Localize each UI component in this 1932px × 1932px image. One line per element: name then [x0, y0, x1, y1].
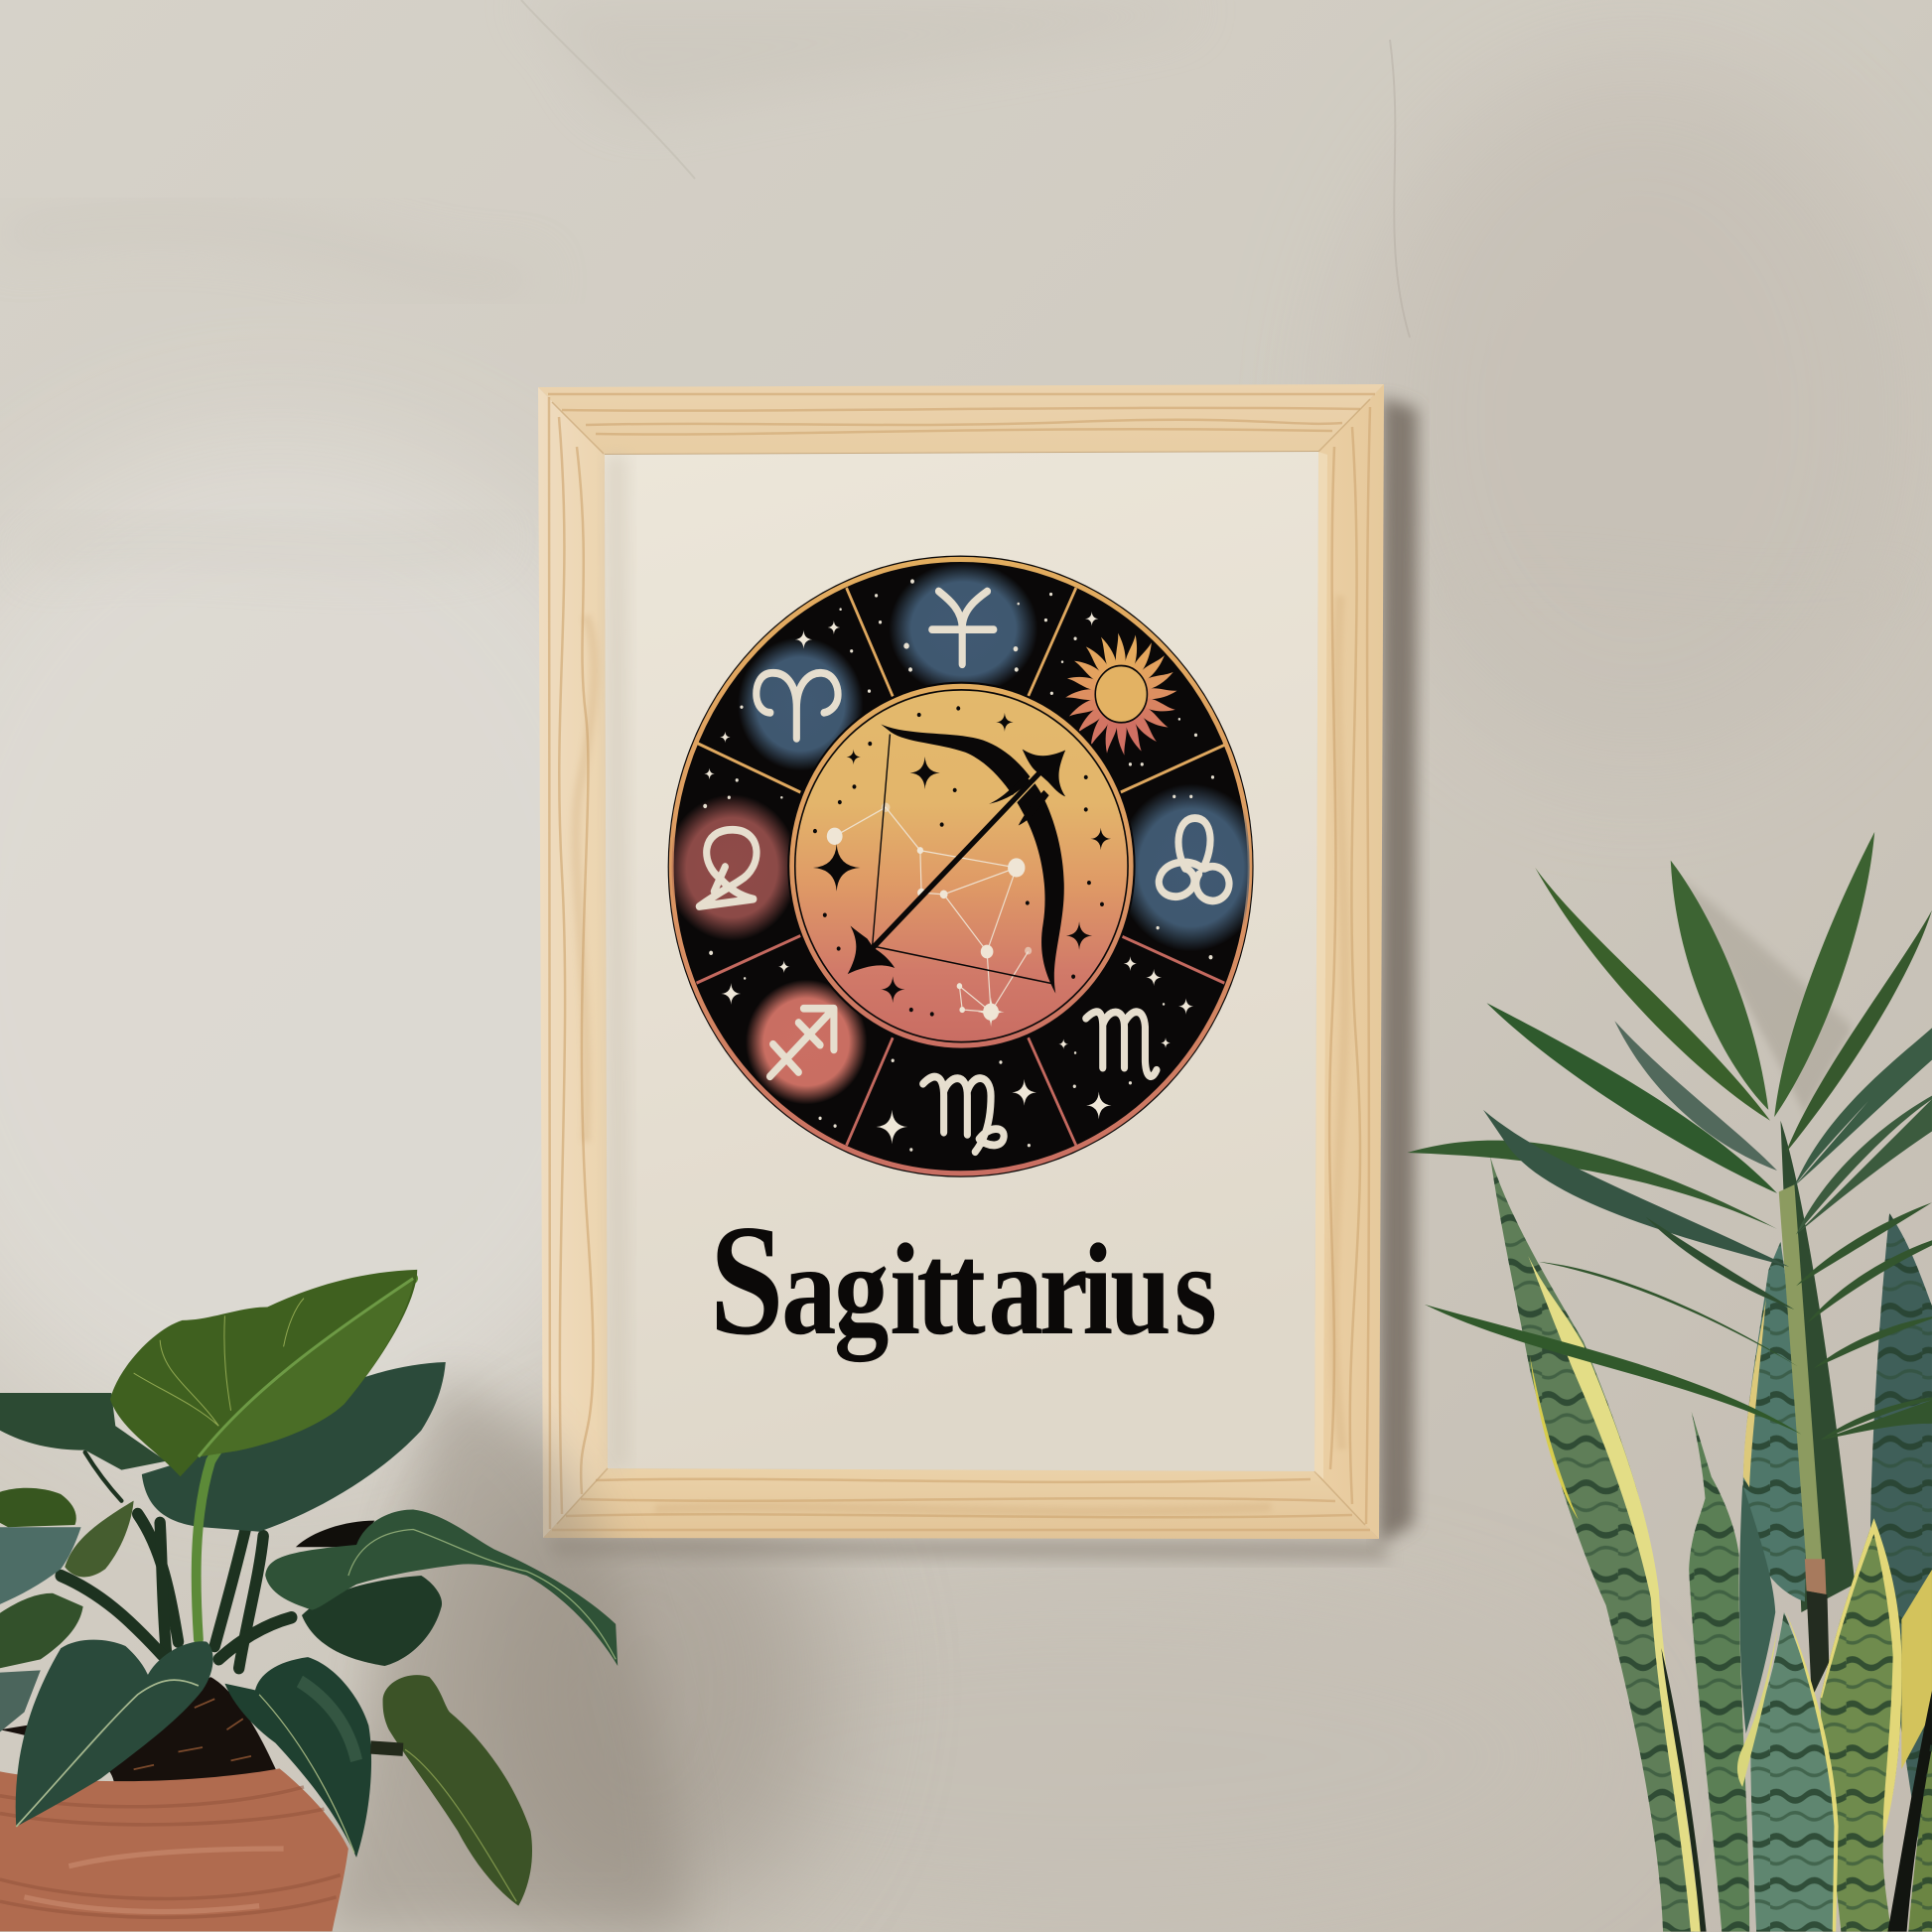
arrow head — [1023, 750, 1065, 796]
snake leaf: center back — [1743, 1242, 1806, 1601]
snake leaf: back right — [1870, 1213, 1932, 1932]
leaflets right thin — [1796, 1202, 1932, 1440]
leaflet left broad — [1483, 1110, 1789, 1267]
leaflet top right — [1774, 832, 1874, 1117]
leaf: bottom center — [224, 1657, 371, 1858]
leaflet left thin — [1539, 1262, 1798, 1366]
stalk of hanging leaf — [370, 1747, 403, 1749]
leaflet faded behind — [1614, 1021, 1777, 1171]
title: Sagittarius — [710, 1191, 1217, 1368]
leaf: small upper left — [0, 1488, 76, 1527]
icon: horned sign, top — [932, 592, 994, 664]
icon: sea-goat sign, bottom — [923, 1077, 1004, 1152]
bow and arrow — [848, 725, 1065, 994]
leaflet lowest long — [1425, 1305, 1801, 1435]
terracotta pot — [0, 1768, 348, 1931]
leaflet left upper — [1486, 1003, 1777, 1193]
leaf: dark leaf behind — [142, 1362, 446, 1532]
small stars on the ring — [704, 612, 1193, 1144]
leaflet left short — [1646, 1217, 1794, 1310]
leaf: drooping right — [265, 1510, 618, 1666]
snake leaf: front right — [1821, 1518, 1901, 1932]
light stem of big leaf — [197, 1279, 413, 1639]
icon: loop sign, left — [699, 830, 757, 906]
leaflet right 1 — [1786, 910, 1932, 1153]
leaf: left dark — [0, 1393, 166, 1470]
leaflet right 2 — [1794, 1028, 1932, 1186]
snake leaf: front A — [1689, 1412, 1749, 1932]
leaflet left horizontal — [1407, 1141, 1777, 1229]
arrow fletching — [848, 925, 895, 974]
left potted plant — [0, 1270, 618, 1931]
gap around arrow — [1003, 774, 1038, 812]
segment dividers — [697, 588, 1224, 1146]
snake leaf: front center — [1737, 1611, 1839, 1932]
wall shadow of palm — [1680, 879, 1854, 1114]
soil — [0, 1677, 284, 1796]
leaflet top broad — [1671, 861, 1768, 1110]
snake leaf: behind center — [1739, 1484, 1775, 1733]
snake leaf: big left variegated — [1490, 1157, 1707, 1932]
left plant shadow — [318, 1380, 685, 1932]
palm spear behind — [1780, 1121, 1855, 1612]
snake leaf: far right edge — [1887, 1570, 1932, 1932]
leaf: black gap — [296, 1521, 374, 1547]
leaf: below drooping — [302, 1576, 442, 1666]
palm stalk — [1779, 1184, 1822, 1566]
icon: sun — [1065, 633, 1176, 756]
icon: trefoil sign, right — [1159, 818, 1229, 900]
bow — [881, 725, 1064, 994]
icon: scorpion sign, lower right — [1086, 1012, 1157, 1076]
wheel outer ring — [668, 556, 1254, 1177]
leaf: olive left — [65, 1501, 134, 1577]
inner stars and dots — [813, 706, 1111, 1017]
leaf: lower left — [0, 1593, 83, 1668]
palm leaflets — [1407, 832, 1932, 1440]
frame left rail — [538, 387, 608, 1538]
leaf: lower left pale — [0, 1670, 41, 1732]
bow string — [873, 735, 1053, 984]
frame shadow on wall — [546, 397, 1418, 1561]
poster paper — [605, 452, 1318, 1471]
zodiac glyph icons — [699, 592, 1229, 1152]
leaf: grey green left — [0, 1527, 81, 1604]
stems — [61, 1452, 292, 1668]
wooden picture frame — [538, 384, 1384, 1539]
colored glows behind signs — [665, 562, 1266, 1104]
constellation — [827, 802, 1032, 1027]
leaflet right 3 — [1796, 1096, 1932, 1235]
center disc — [787, 682, 1136, 1050]
small dots on the ring — [703, 579, 1214, 1152]
frame bottom rail — [543, 1468, 1379, 1539]
icon: archer sign, lower left — [769, 1009, 834, 1076]
right plants — [1407, 832, 1932, 1932]
arrow barbs — [989, 775, 1049, 825]
frame right rail — [1314, 384, 1384, 1539]
leaf: big top green — [110, 1270, 417, 1476]
leaflet upper left long — [1535, 868, 1770, 1121]
frame top rail — [538, 384, 1384, 455]
arrow shaft — [869, 762, 1049, 952]
leaf: lower right hanging — [383, 1675, 532, 1906]
leaf: bottom left large — [16, 1640, 213, 1827]
icon: ram sign, upper left — [757, 673, 838, 739]
zodiac wheel — [665, 556, 1266, 1177]
